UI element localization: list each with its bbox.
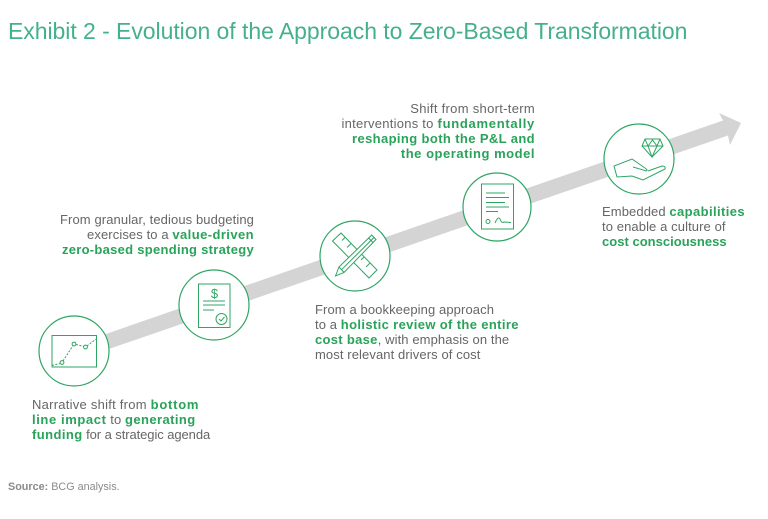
- text: step 3: From a bookkeeping approach: [315, 302, 494, 317]
- text: step 4: reshaping both the P&L and: [352, 131, 535, 146]
- text: step 2: zero-based spending strategy: [62, 242, 254, 257]
- text: step 1: line impact to generating: [32, 412, 196, 427]
- arrow: [74, 113, 741, 361]
- text: step 2: [60, 212, 254, 257]
- text: step 3: [315, 302, 519, 362]
- icon: budget document: [179, 270, 249, 340]
- text: step 5: Embedded capabilities: [602, 204, 745, 219]
- text: step 4: interventions to fundamentally: [341, 116, 535, 131]
- icon: ruler and pencil: [320, 221, 390, 291]
- text: step 5: cost consciousness: [602, 234, 727, 249]
- source note: Source: BCG analysis.: [8, 481, 120, 493]
- text: step 2: From granular, tedious budgeting: [60, 212, 254, 227]
- text: step 1: Narrative shift from bottom: [32, 397, 199, 412]
- icon: hand with diamond: [604, 124, 674, 194]
- text: step 2: exercises to a value-driven: [87, 227, 254, 242]
- icon: budget document: $: [211, 286, 219, 301]
- text: step 5: to enable a culture of: [602, 219, 726, 234]
- text: step 3: to a holistic review of the entire: [315, 317, 519, 332]
- text: step 1: [32, 397, 210, 442]
- text: step 4: [341, 101, 535, 161]
- text: step 3: cost base, with emphasis on the: [315, 332, 509, 347]
- text: step 4: the operating model: [401, 146, 535, 161]
- text: step 3: most relevant drivers of cost: [315, 347, 480, 362]
- icon: contract: [463, 173, 531, 241]
- icon: chart: [39, 316, 109, 386]
- text: step 4: Shift from short-term: [410, 101, 535, 116]
- title: Exhibit 2 - Evolution of the Approach to Zero-Based Transformation: [8, 18, 687, 44]
- text: step 1: funding for a strategic agenda: [32, 427, 210, 442]
- text: step 5: [602, 204, 745, 249]
